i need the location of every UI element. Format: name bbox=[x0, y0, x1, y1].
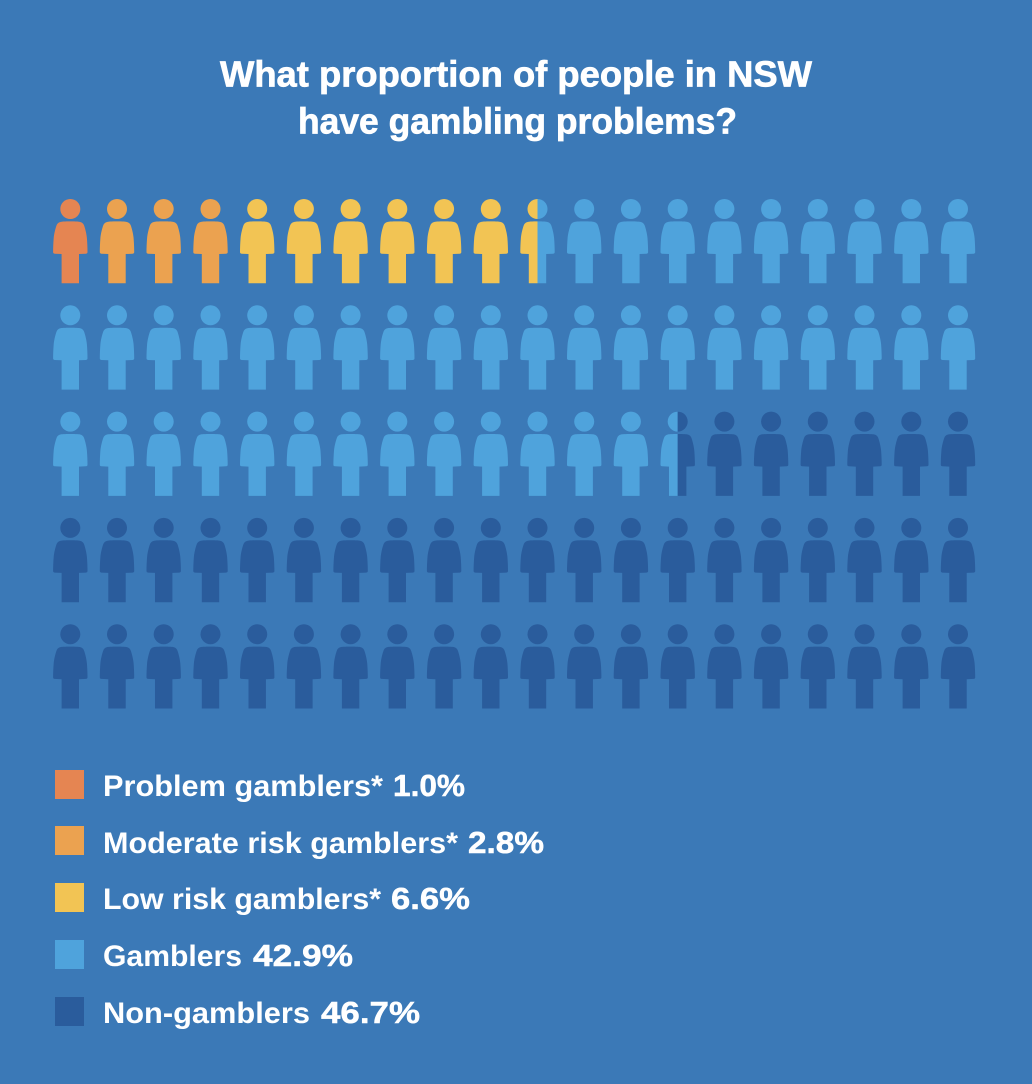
legend item: problem gamblers bbox=[55, 768, 465, 803]
title: What proportion of people in NSW bbox=[220, 54, 812, 94]
legend item: problem gamblers: Problem gamblers* bbox=[103, 770, 383, 803]
row 2: gamblers bbox=[53, 305, 975, 390]
legend item: low risk gamblers: Low risk gamblers* bbox=[103, 883, 381, 916]
title bbox=[220, 54, 812, 142]
pictogram chart: 100 people bbox=[53, 199, 975, 708]
legend bbox=[55, 768, 544, 1030]
row 5: non-gamblers bbox=[53, 624, 975, 708]
row 4: non-gamblers bbox=[53, 518, 975, 602]
title: have gambling problems? bbox=[298, 100, 737, 142]
legend item: gamblers: 42.9% bbox=[253, 938, 353, 973]
legend item: gamblers bbox=[55, 938, 353, 973]
legend item: low risk gamblers bbox=[55, 881, 470, 916]
legend item: non-gamblers: 46.7% bbox=[321, 995, 420, 1030]
row 3: gamblers and non-gamblers bbox=[53, 412, 975, 496]
legend item: moderate risk gamblers: Moderate risk gamblers* bbox=[103, 827, 458, 860]
legend item: low risk gamblers: 6.6% bbox=[391, 881, 470, 916]
legend item: moderate risk gamblers: 2.8% bbox=[468, 825, 544, 860]
legend item: non-gamblers: Non-gamblers bbox=[103, 997, 310, 1030]
legend item: gamblers: Gamblers bbox=[103, 940, 242, 973]
legend item: non-gamblers bbox=[55, 995, 420, 1030]
legend item: problem gamblers: 1.0% bbox=[393, 768, 465, 803]
legend item: moderate risk gamblers bbox=[55, 825, 544, 860]
row 1: problem, moderate risk, low risk and gamblers bbox=[53, 199, 975, 283]
